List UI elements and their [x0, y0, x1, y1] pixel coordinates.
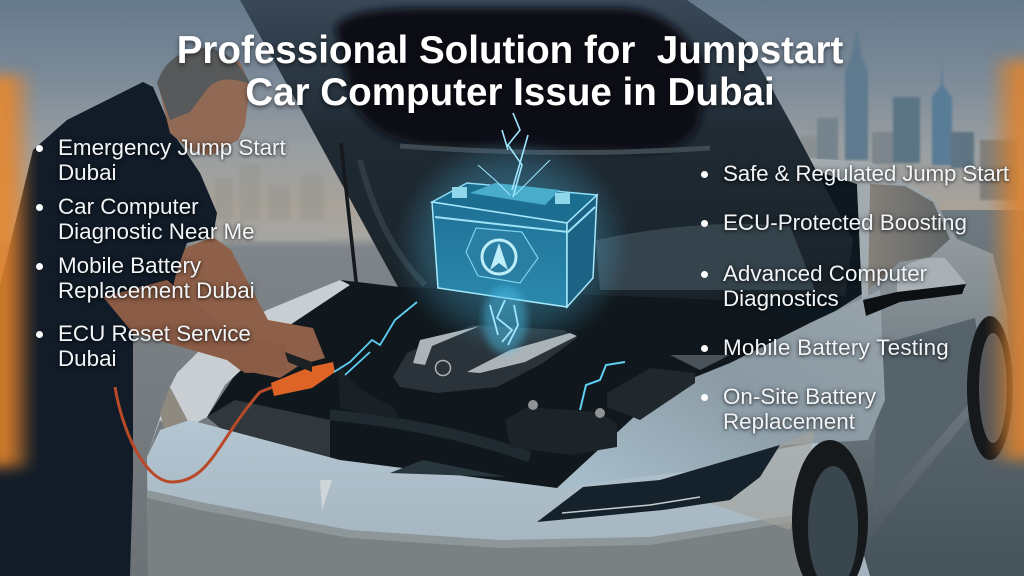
list item [58, 322, 251, 371]
list item [58, 136, 286, 185]
left service list [36, 135, 288, 370]
list item: Replacement [723, 408, 855, 434]
jumper clamp and cable [115, 352, 335, 482]
list item [58, 254, 255, 303]
list item: Advanced Computer [723, 261, 927, 286]
list item [723, 385, 876, 434]
mechanic [0, 48, 325, 576]
list item: Dubai [58, 160, 117, 184]
list item: Car Computer [58, 194, 199, 219]
list item: Mobile Battery Testing [723, 335, 949, 360]
right benefits list [701, 161, 1011, 436]
Dubai skyline [215, 29, 1018, 220]
engine details [330, 325, 730, 477]
list item: Diagnostic Near Me [58, 218, 255, 244]
list item [58, 195, 255, 244]
list item: Diagnostics [723, 286, 839, 310]
list item: Replacement Dubai [58, 278, 255, 302]
list item: ECU Reset Service [58, 321, 251, 346]
list item: On-Site Battery [723, 384, 876, 409]
electric sparks [334, 113, 625, 410]
list item: Dubai [58, 346, 117, 370]
car front and engine bay [147, 280, 885, 576]
orange side glow [0, 60, 1024, 467]
list item: Emergency Jump Start [58, 135, 286, 160]
list item [723, 262, 927, 311]
headlights, mirror and wheels [320, 258, 1013, 576]
list item: Mobile Battery [58, 253, 201, 278]
list item: Safe & Regulated Jump Start [723, 161, 1009, 186]
open car hood [240, 0, 853, 300]
glowing blue battery [395, 137, 631, 353]
list item: ECU-Protected Boosting [723, 210, 967, 235]
car body side and roof [690, 158, 1012, 576]
title: Professional Solution for Jumpstart Car Computer Issue in Dubai [177, 29, 843, 114]
